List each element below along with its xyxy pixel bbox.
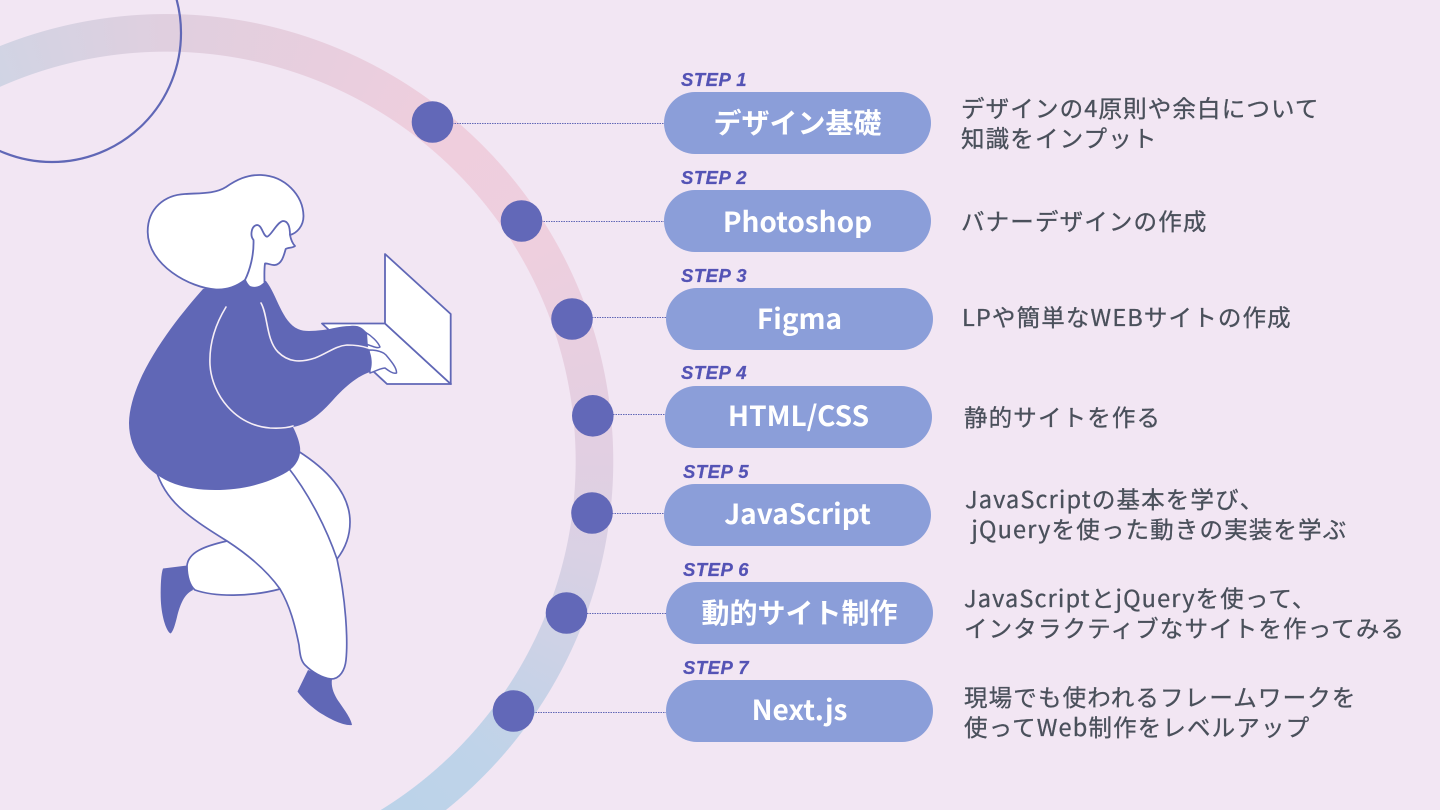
step 1 description: デザインの4原則や余白について [961, 90, 1320, 124]
step 1 pill: デザイン基礎 [713, 102, 882, 142]
gradient ring [0, 14, 614, 810]
step 2 label: STEP 2 [681, 167, 747, 188]
step 6 pill: 動的サイト制作 [701, 592, 898, 632]
hands [365, 332, 397, 373]
step 1 description [961, 90, 1320, 154]
step 1 description: 知識をインプット [961, 120, 1158, 154]
step 3 pill: Figma [757, 298, 842, 338]
thin circle top-left [0, 0, 181, 162]
step 4 description: 静的サイトを作る [964, 399, 1161, 433]
step 7 description: 現場でも使われるフレームワークを [964, 679, 1357, 713]
step 2 description: バナーデザインの作成 [961, 203, 1208, 237]
connector lines [452, 124, 666, 712]
step 7 pill [666, 680, 933, 742]
timeline dots [412, 101, 614, 732]
step 7 description: 使ってWeb制作をレベルアップ [964, 709, 1310, 743]
hairline and ear [245, 221, 290, 280]
step 6 description: JavaScriptとjQueryを使って、 [964, 580, 1316, 614]
step 6 pill [666, 582, 933, 644]
step 4 pill [665, 386, 932, 448]
step 2 pill [664, 190, 931, 252]
step 7 pill: Next.js [752, 689, 847, 729]
step 1 label: STEP 1 [681, 69, 747, 90]
back thigh [187, 530, 290, 595]
back hip [285, 451, 350, 575]
head and hair [148, 175, 304, 290]
step 5 description: jQueryを使った動きの実装を学ぶ [971, 511, 1347, 545]
step 5 description: JavaScriptの基本を学び、 [965, 481, 1264, 515]
step 6 description [964, 580, 1405, 644]
step 4 label: STEP 4 [681, 362, 747, 383]
step 5 description [965, 481, 1347, 545]
step 3 label: STEP 3 [681, 265, 747, 286]
front leg [156, 466, 347, 679]
back foot [161, 566, 193, 634]
step 4 pill: HTML/CSS [728, 395, 869, 435]
step 5 pill: JavaScript [724, 493, 871, 533]
step 3 pill [666, 288, 933, 350]
step 1 pill [664, 92, 931, 154]
step 6 label: STEP 6 [683, 559, 749, 580]
step 7 description [964, 679, 1357, 743]
step 5 label: STEP 5 [683, 461, 749, 482]
sweater arm lines [210, 303, 368, 428]
step 5 pill [664, 484, 931, 546]
step 2 pill: Photoshop [723, 201, 872, 241]
step 7 label: STEP 7 [683, 657, 749, 678]
laptop [322, 254, 451, 384]
front foot [298, 670, 352, 725]
sweater [129, 280, 372, 490]
illustration: person typing on a laptop [129, 175, 451, 725]
step 3 description: LPや簡単なWEBサイトの作成 [962, 299, 1292, 333]
step 6 description: インタラクティブなサイトを作ってみる [964, 610, 1405, 644]
